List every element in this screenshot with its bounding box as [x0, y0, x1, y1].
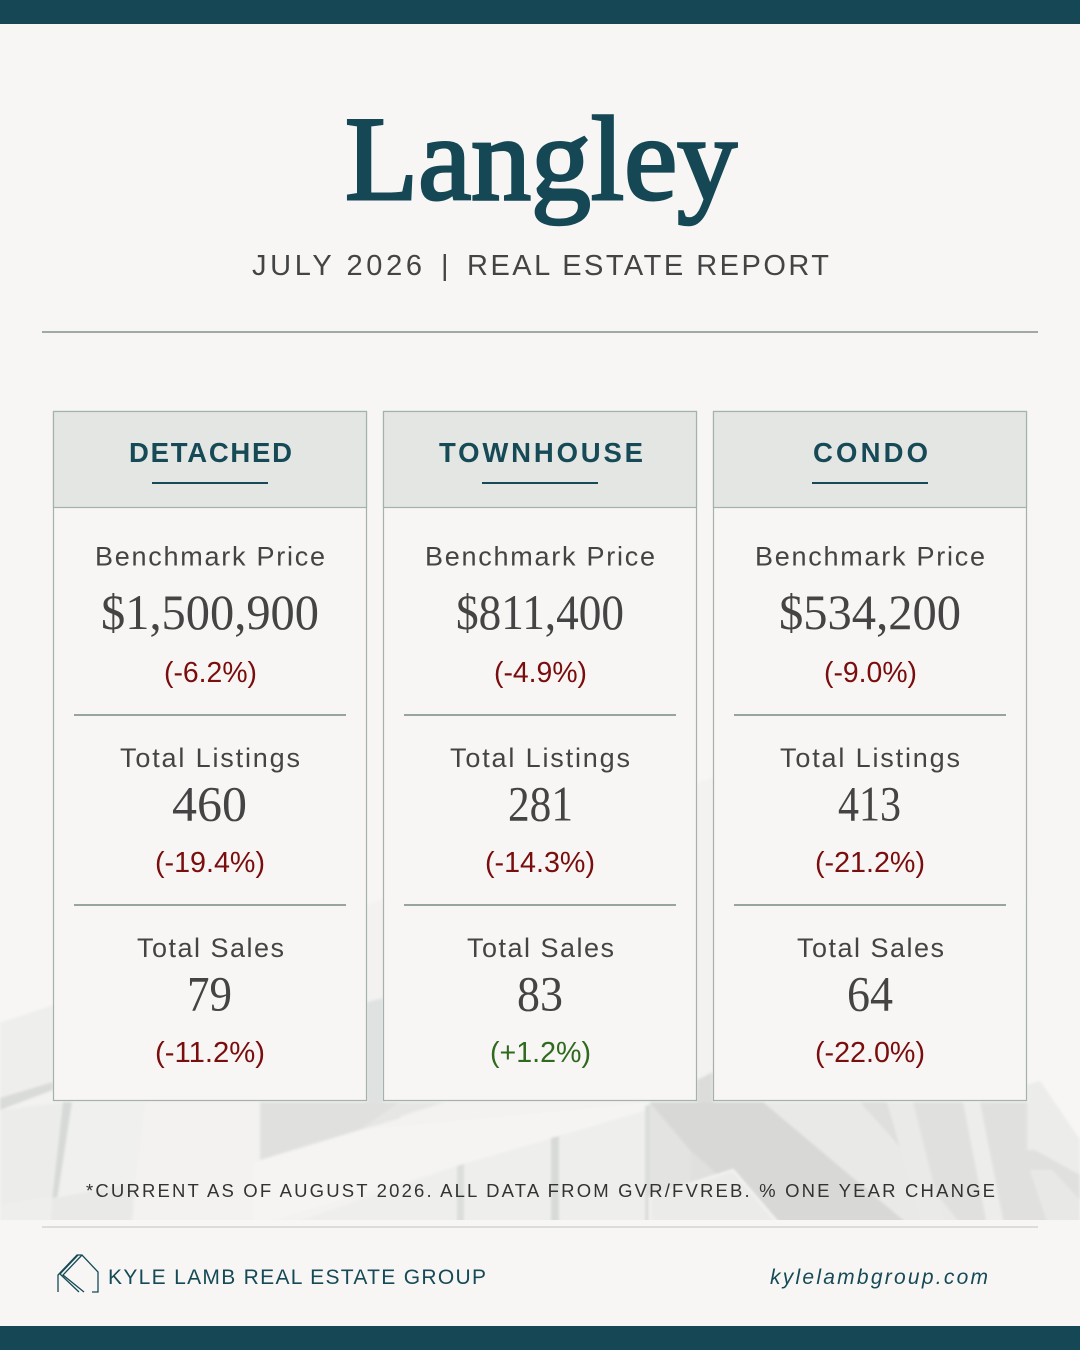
website: kylelambgroup.com — [770, 1266, 988, 1289]
benchmark price: condo — [755, 542, 985, 689]
subtitle: JULY 2026 — [252, 250, 422, 282]
total sales: condo: 64 — [847, 966, 893, 1022]
title: Langley — [345, 92, 737, 225]
total sales: condo — [797, 933, 944, 1069]
header divider — [42, 331, 1038, 333]
benchmark price: condo: $534,200 — [779, 584, 961, 640]
heading: condo: CONDO — [813, 437, 928, 468]
total sales: townhouse — [467, 933, 614, 1069]
benchmark price: condo: (-9.0%) — [824, 657, 917, 689]
panel: townhouse — [384, 412, 696, 1100]
footer background — [0, 1220, 1080, 1326]
panel: detached — [54, 412, 366, 1100]
total listings: detached: Total Listings — [120, 743, 300, 773]
total listings: detached: (-19.4%) — [155, 847, 265, 879]
total sales: detached: Total Sales — [137, 933, 284, 963]
icon: house logo — [58, 1255, 98, 1292]
total listings: detached: 460 — [172, 776, 247, 832]
total sales: townhouse: Total Sales — [467, 933, 614, 963]
total sales: townhouse: (+1.2%) — [490, 1037, 591, 1069]
total listings: townhouse: (-14.3%) — [485, 847, 595, 879]
benchmark price: townhouse — [425, 542, 655, 689]
total listings: condo — [780, 743, 960, 879]
bottom bar — [0, 1326, 1080, 1350]
benchmark price: townhouse: Benchmark Price — [425, 542, 655, 572]
brand name: KYLE LAMB REAL ESTATE GROUP — [108, 1266, 486, 1289]
total sales: detached: 79 — [187, 966, 232, 1022]
benchmark price: detached: $1,500,900 — [101, 584, 319, 640]
total sales: townhouse: 83 — [517, 966, 563, 1022]
subtitle: REAL ESTATE REPORT — [467, 250, 829, 282]
total sales: condo: Total Sales — [797, 933, 944, 963]
total listings: townhouse: Total Listings — [450, 743, 630, 773]
total listings: townhouse — [450, 743, 630, 879]
total listings: townhouse: 281 — [508, 776, 573, 832]
panel: condo — [714, 412, 1026, 1100]
benchmark price: detached: (-6.2%) — [164, 657, 257, 689]
heading: detached: DETACHED — [129, 437, 292, 468]
top bar — [0, 0, 1080, 24]
benchmark price: townhouse: $811,400 — [456, 584, 624, 640]
total listings: condo: (-21.2%) — [815, 847, 925, 879]
total listings: condo: Total Listings — [780, 743, 960, 773]
subtitle — [252, 250, 829, 282]
total sales: condo: (-22.0%) — [815, 1037, 925, 1069]
background: building photo — [0, 775, 1080, 1230]
footnote: *CURRENT AS OF AUGUST 2026. ALL DATA FROM GVR/FVREB. % ONE YEAR CHANGE — [86, 1180, 995, 1201]
total sales: detached: (-11.2%) — [155, 1037, 265, 1069]
total sales: detached — [137, 933, 284, 1069]
total listings: detached — [120, 743, 300, 879]
heading: townhouse: TOWNHOUSE — [439, 437, 643, 468]
benchmark price: condo: Benchmark Price — [755, 542, 985, 572]
benchmark price: townhouse: (-4.9%) — [494, 657, 587, 689]
benchmark price: detached: Benchmark Price — [95, 542, 325, 572]
total listings: condo: 413 — [838, 776, 901, 832]
benchmark price: detached — [95, 542, 325, 689]
subtitle: | — [441, 250, 449, 282]
